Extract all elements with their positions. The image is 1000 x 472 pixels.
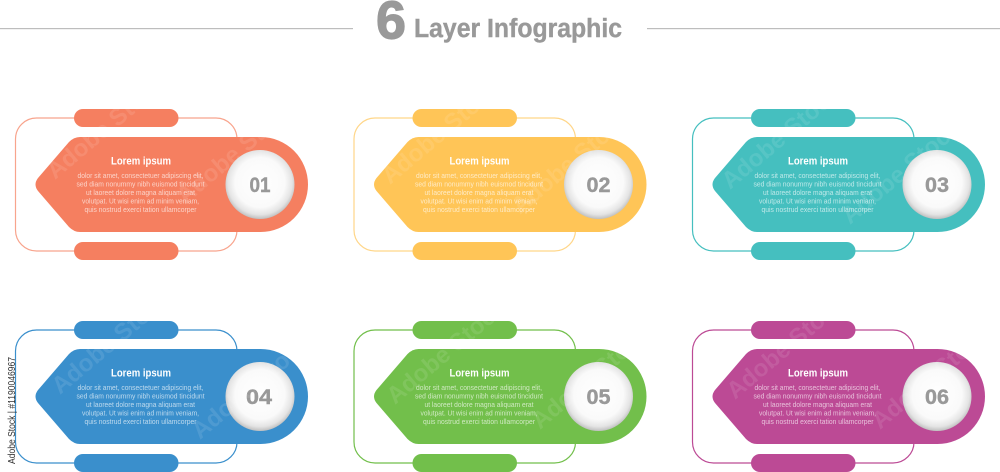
body text: ut laoreet dolore magna aliquam erat: [763, 188, 872, 197]
outline frame: [16, 330, 237, 463]
number: 01: [250, 174, 271, 197]
body text: volutpat. Ut wisi enim ad minim veniam,: [420, 408, 538, 417]
top pill: [751, 321, 856, 339]
heading: Lorem ipsum: [788, 156, 848, 168]
outline frame: [692, 330, 914, 463]
body text: [415, 383, 543, 426]
body text: dolor sit amet, consectetuer adipiscing elit,: [78, 171, 204, 180]
body text: ut laoreet dolore magna aliquam erat: [86, 188, 195, 197]
watermark: Adobe Stock: [382, 294, 512, 410]
panel: 06: [692, 321, 985, 472]
bottom pill: [751, 454, 856, 472]
title: [0, 0, 1000, 50]
body text: quis nostrud exerci tation ullamcorper: [84, 417, 197, 426]
number disc: [226, 362, 294, 431]
body text: ut laoreet dolore magna aliquam erat: [763, 400, 872, 409]
heading: Lorem ipsum: [450, 368, 510, 380]
body text: quis nostrud exerci tation ullamcorper: [423, 205, 536, 214]
watermark: Adobe Stock: [837, 114, 967, 230]
top pill: [412, 321, 517, 339]
outline frame: [16, 118, 237, 251]
top pill: [74, 109, 178, 127]
stock id label: Adobe Stock | #1190046967: [6, 357, 18, 464]
body text: quis nostrud exerci tation ullamcorper: [423, 417, 536, 426]
body text: ut laoreet dolore magna aliquam erat: [424, 188, 534, 197]
arrow body: [374, 349, 646, 444]
body text: sed diam nonummy nibh euismod tincidunt: [754, 392, 882, 400]
number disc: [902, 150, 972, 219]
panel: 02: [354, 109, 646, 260]
watermark: Adobe Stock: [42, 69, 172, 185]
arrow body: [712, 137, 985, 232]
number: 04: [246, 386, 272, 409]
body text: volutpat. Ut wisi enim ad minim veniam,: [82, 196, 199, 205]
outline frame: [692, 118, 914, 251]
heading: Lorem ipsum: [450, 156, 510, 168]
heading: Lorem ipsum: [111, 156, 171, 168]
body text: quis nostrud exerci tation ullamcorper: [762, 205, 874, 214]
body text: [415, 171, 543, 214]
body text: sed diam nonummy nibh euismod tincidunt: [76, 392, 204, 400]
body text: ut laoreet dolore magna aliquam erat: [86, 400, 195, 409]
number: 06: [925, 386, 949, 409]
body text: volutpat. Ut wisi enim ad minim veniam,: [759, 408, 876, 417]
heading: Lorem ipsum: [111, 368, 171, 380]
body text: [754, 383, 882, 426]
number disc: [226, 150, 294, 219]
number: 02: [586, 174, 610, 197]
watermark: Adobe Stock: [172, 94, 302, 210]
body text: dolor sit amet, consectetuer adipiscing elit,: [416, 171, 542, 180]
panel: 01: [16, 109, 308, 260]
watermark: Adobe Stock: [867, 319, 997, 435]
top pill: [74, 321, 178, 339]
body text: [76, 383, 204, 426]
outline frame: [354, 118, 576, 251]
panel: 04: [16, 321, 308, 472]
body text: dolor sit amet, consectetuer adipiscing elit,: [754, 171, 880, 180]
number: 05: [586, 386, 611, 409]
heading: Lorem ipsum: [788, 368, 848, 380]
title: Layer Infographic: [414, 15, 622, 43]
body text: sed diam nonummy nibh euismod tincidunt: [415, 392, 543, 400]
body text: quis nostrud exerci tation ullamcorper: [84, 205, 197, 214]
body text: dolor sit amet, consectetuer adipiscing elit,: [754, 383, 880, 392]
watermark: Adobe Stock: [717, 79, 847, 195]
body text: ut laoreet dolore magna aliquam erat: [424, 400, 534, 409]
arrow body: [374, 137, 646, 232]
body text: volutpat. Ut wisi enim ad minim veniam,: [759, 196, 876, 205]
panel: 05: [354, 321, 646, 472]
top pill: [751, 109, 856, 127]
watermark: [42, 69, 997, 445]
body text: sed diam nonummy nibh euismod tincidunt: [415, 180, 543, 188]
top pill: [412, 109, 517, 127]
body text: dolor sit amet, consectetuer adipiscing elit,: [78, 383, 204, 392]
arrow body: [712, 349, 985, 444]
number disc: [902, 362, 972, 431]
bottom pill: [74, 242, 178, 260]
bottom pill: [412, 454, 517, 472]
watermark: Adobe Stock: [722, 289, 852, 405]
watermark: Adobe Stock: [47, 284, 177, 400]
arrow body: [36, 349, 308, 444]
watermark: Adobe Stock: [187, 329, 317, 445]
body text: volutpat. Ut wisi enim ad minim veniam,: [420, 196, 538, 205]
body text: [76, 171, 204, 214]
bottom pill: [751, 242, 856, 260]
number disc: [564, 362, 633, 431]
number: 03: [925, 174, 949, 197]
body text: sed diam nonummy nibh euismod tincidunt: [754, 180, 882, 188]
body text: volutpat. Ut wisi enim ad minim veniam,: [82, 408, 199, 417]
watermark: Adobe Stock: [527, 319, 657, 435]
bottom pill: [74, 454, 178, 472]
bottom pill: [412, 242, 517, 260]
arrow body: [36, 137, 308, 232]
body text: quis nostrud exerci tation ullamcorper: [762, 417, 874, 426]
body text: sed diam nonummy nibh euismod tincidunt: [76, 180, 204, 188]
panel: 03: [692, 109, 985, 260]
watermark: Adobe Stock: [377, 74, 507, 190]
body text: [754, 171, 882, 214]
body text: dolor sit amet, consectetuer adipiscing elit,: [416, 383, 542, 392]
outline frame: [354, 330, 576, 463]
number disc: [564, 150, 633, 219]
watermark: Adobe Stock: [507, 104, 637, 220]
